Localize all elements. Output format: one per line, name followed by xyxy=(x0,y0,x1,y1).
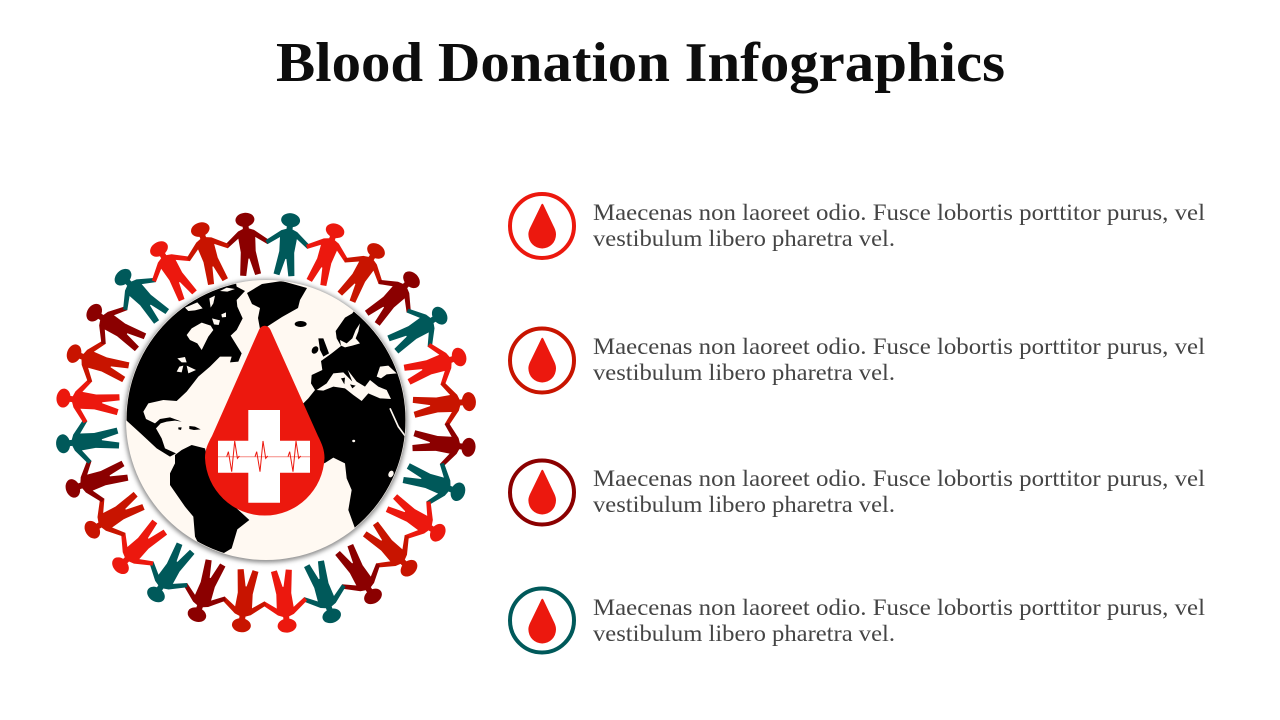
South America xyxy=(170,445,249,555)
text block 2: Maecenas non laoreet odio. Fusce lobortis porttitor purus, vel xyxy=(593,334,1205,359)
heartbeat line xyxy=(218,441,310,472)
icon: drop in maroon ring xyxy=(510,460,574,524)
central blood drop with cross xyxy=(205,326,324,516)
person 9 xyxy=(410,418,478,470)
text block 4: vestibulum libero pharetra vel. xyxy=(593,621,895,646)
person 8 xyxy=(411,379,478,430)
person 23 xyxy=(54,375,122,427)
title: Blood Donation Infographics xyxy=(276,32,1005,94)
North America xyxy=(126,284,245,457)
icon: drop in teal ring xyxy=(510,588,574,652)
person 18 xyxy=(133,535,205,613)
person 10 xyxy=(398,452,472,515)
person 20 xyxy=(75,481,152,553)
person 12 xyxy=(354,512,430,589)
person 17 xyxy=(173,554,237,629)
person 3 xyxy=(295,217,359,291)
person 7 xyxy=(399,333,473,396)
Greenland xyxy=(247,281,307,328)
person 16 xyxy=(218,567,270,635)
ring of people holding hands xyxy=(54,211,478,635)
text block 3 xyxy=(593,466,1205,517)
Europe, Africa and Asia xyxy=(294,312,406,528)
text block 2 xyxy=(593,334,1205,385)
white medical cross xyxy=(218,410,310,503)
person 24 xyxy=(60,330,134,394)
person 26 xyxy=(102,256,178,333)
person 1 xyxy=(222,211,273,278)
icon: drop in red ring xyxy=(510,194,574,258)
text block 1: Maecenas non laoreet odio. Fusce lobortis porttitor purus, vel xyxy=(593,200,1205,225)
person 14 xyxy=(292,556,355,630)
text block 3: Maecenas non laoreet odio. Fusce lobortis porttitor purus, vel xyxy=(593,466,1205,491)
person 22 xyxy=(54,416,121,467)
person 28 xyxy=(177,216,240,290)
person 13 xyxy=(324,537,396,614)
text block 2: vestibulum libero pharetra vel. xyxy=(593,360,895,385)
person 6 xyxy=(380,293,457,364)
person 27 xyxy=(136,231,208,309)
text block 4 xyxy=(593,595,1205,646)
icon: drop in dark-red ring xyxy=(510,328,574,392)
text block 1: vestibulum libero pharetra vel. xyxy=(593,226,895,251)
person 25 xyxy=(76,290,154,362)
person 5 xyxy=(356,259,432,335)
text block 1 xyxy=(593,200,1205,251)
text block 3: vestibulum libero pharetra vel. xyxy=(593,492,895,517)
person 4 xyxy=(327,233,399,310)
text block 4: Maecenas non laoreet odio. Fusce lobortis porttitor purus, vel xyxy=(593,595,1205,620)
person 11 xyxy=(378,484,456,555)
person 21 xyxy=(59,449,133,512)
person 2 xyxy=(262,211,314,278)
globe with world map xyxy=(121,276,411,566)
person 19 xyxy=(100,510,176,587)
person 15 xyxy=(259,568,310,635)
Caribbean islands xyxy=(178,426,201,430)
